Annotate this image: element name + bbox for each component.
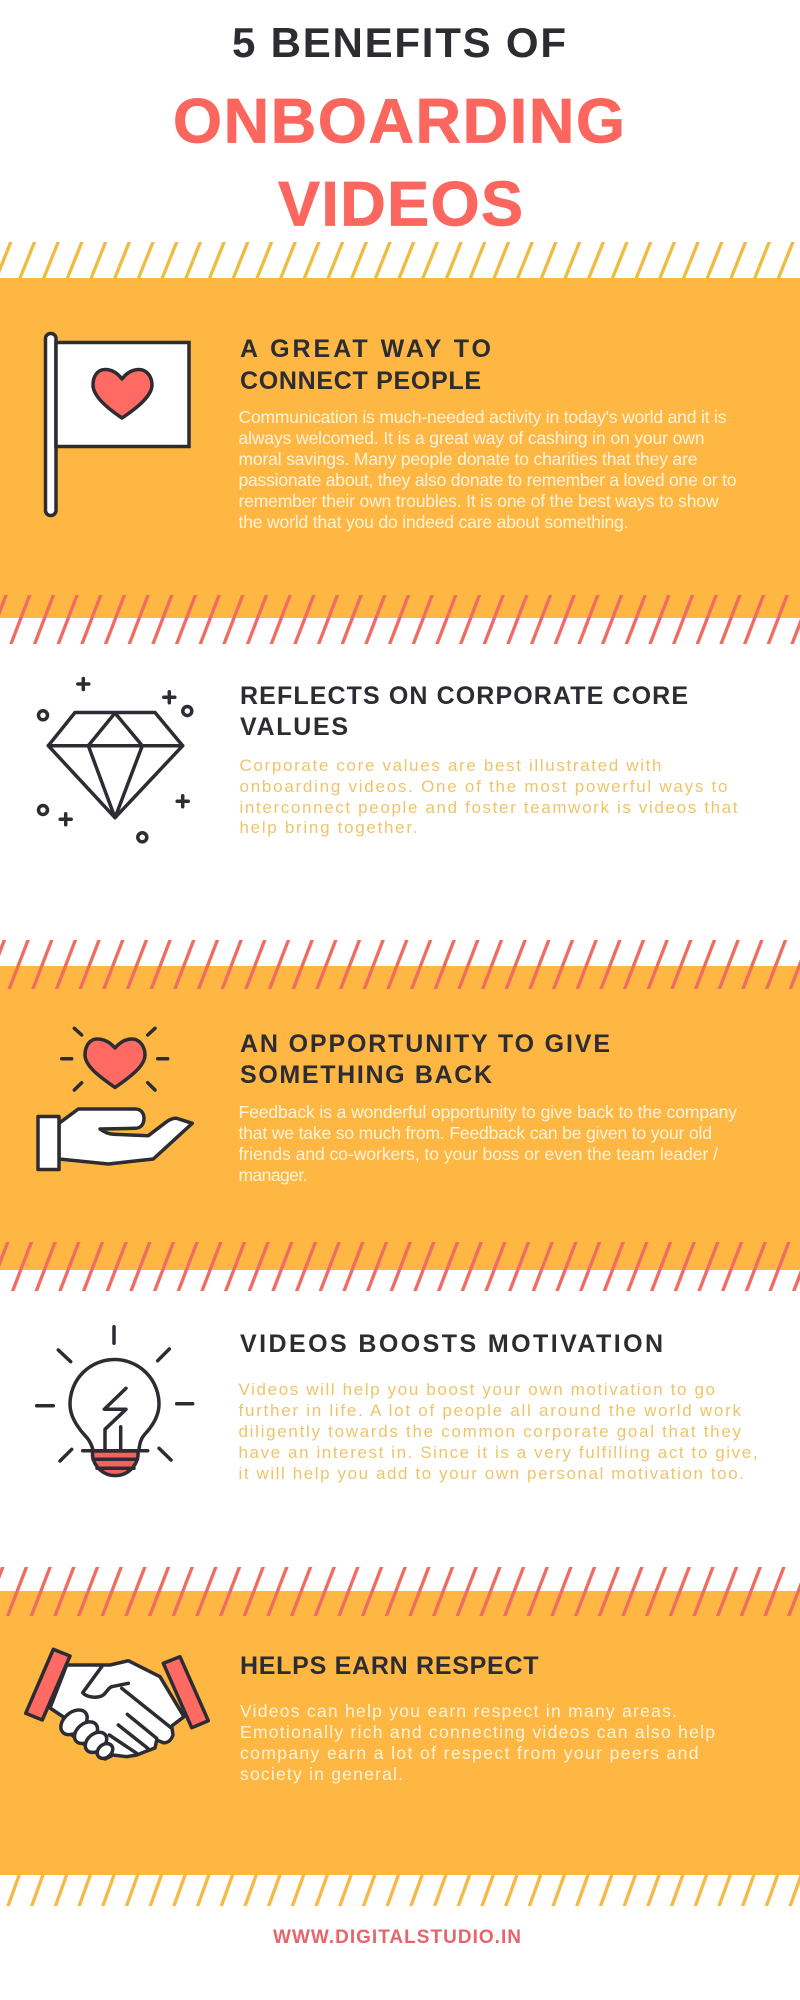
icon: flag with heart [46,334,189,516]
panel: videos boosts motivation [0,1270,800,1591]
text block: feedback: Feedback is a wonderful opportunity to give back to the company [238,1102,737,1122]
icon: light bulb [37,1327,193,1476]
heading: a great way to connect people: A GREAT WAY TO [240,335,491,363]
hatched divider: red 3 [0,1242,800,1291]
heading: helps earn respect: HELPS EARN RESPECT [240,1652,538,1680]
heading: reflects on corporate core values: VALUES [240,713,348,741]
hatched divider: red 1 [0,595,800,644]
title: VIDEOS [278,170,523,240]
panel: an opportunity to give something back [0,966,800,1270]
title [173,19,625,240]
heading: an opportunity to give something back: SOMETHING BACK [240,1061,492,1089]
text block: communication: always welcomed. It is a great way of cashing in on your own [238,428,704,448]
heading: reflects on corporate core values [240,682,688,741]
text block: communication [238,407,736,532]
panel: helps earn respect [0,1591,800,1875]
text block: feedback: that we take so much from. Feedback can be given to your old [238,1123,712,1143]
panel: reflects on corporate core values [0,618,800,966]
panel: a great way to connect people [0,278,800,618]
icon: handshake [26,1649,208,1761]
title: ONBOARDING [173,86,625,156]
hatched divider: yellow top [0,242,800,278]
text block: earn respect: society in general. [240,1764,403,1784]
hatched divider: red 4 [0,1567,800,1616]
title: 5 BENEFITS OF [232,19,566,66]
text block: boost motivation: have an interest in. Since it is a very fulfilling act to give, [238,1443,757,1462]
footer url: WWW.DIGITALSTUDIO.IN [273,1927,521,1948]
heading: videos boosts motivation: VIDEOS BOOSTS MOTIVATION [240,1330,663,1358]
text block: corporate core values: onboarding videos. One of the most powerful ways to [240,777,728,796]
text block: feedback [238,1102,737,1185]
text block: communication: remember their own troubles. It is one of the best ways to show [238,491,719,511]
text block: earn respect [240,1701,715,1784]
text block: corporate core values: help bring together. [240,818,418,837]
heading: reflects on corporate core values: REFLECTS ON CORPORATE CORE [240,682,688,710]
text block: communication: Communication is much-needed activity in today's world and it is [238,407,727,427]
text block: boost motivation [238,1380,757,1483]
heading: a great way to connect people [240,335,491,395]
hatched divider: yellow bottom [0,1875,800,1906]
heading: a great way to connect people: CONNECT PEOPLE [240,367,481,395]
text block: communication: moral savings. Many people donate to charities that they are [238,449,698,469]
text block: communication: the world that you do indeed care about something. [238,512,628,532]
text block: boost motivation: it will help you add to your own personal motivation too. [238,1464,744,1483]
text block: earn respect: company earn a lot of respect from your peers and [240,1743,698,1763]
text block: corporate core values [240,756,738,837]
text block: communication: passionate about, they also donate to remember a loved one or to [238,470,736,490]
text block: feedback: friends and co-workers, to your boss or even the team leader / [238,1144,718,1164]
text block: boost motivation: diligently towards the common corporate goal that they [238,1422,742,1441]
text block: earn respect: Videos can help you earn respect in many areas. [240,1701,677,1721]
text block: boost motivation: Videos will help you boost your own motivation to go [238,1380,715,1399]
text block: boost motivation: further in life. A lot of people all around the world work [238,1401,741,1420]
text block: feedback: manager. [238,1165,308,1185]
text block: corporate core values: interconnect people and foster teamwork is videos that [240,798,738,817]
hatched divider: red 2 [0,940,800,989]
heading: an opportunity to give something back [240,1030,610,1089]
text block: earn respect: Emotionally rich and connecting videos can also help [240,1722,715,1742]
text block: corporate core values: Corporate core values are best illustrated with [240,756,662,775]
heading: an opportunity to give something back: AN OPPORTUNITY TO GIVE [240,1030,610,1058]
icon: diamond with sparkles [38,678,192,842]
icon: hand holding heart [38,1028,192,1170]
